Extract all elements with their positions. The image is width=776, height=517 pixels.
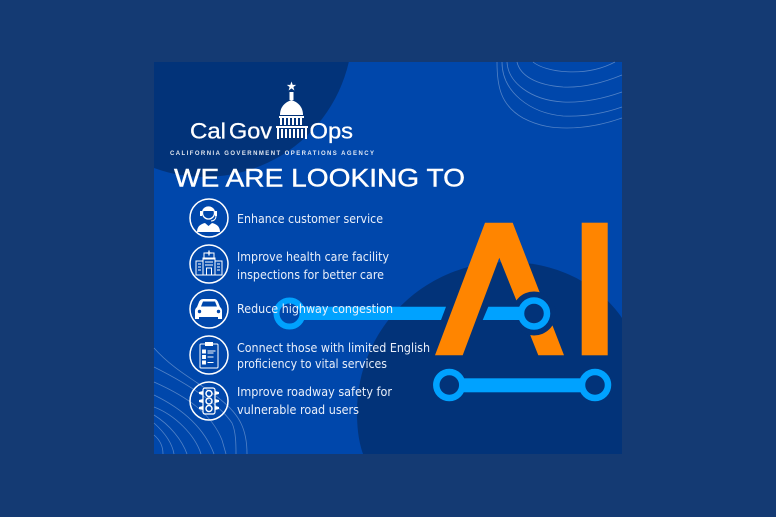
item: health care inspections	[190, 245, 389, 283]
letter A	[435, 223, 564, 355]
item: roadway safety	[190, 382, 392, 420]
icon: clipboard checklist	[190, 336, 228, 374]
icon: headset agent	[190, 199, 228, 237]
text: Enhance customer service	[237, 212, 383, 226]
icon: hospital	[190, 245, 228, 283]
circuit line through A	[276, 300, 547, 326]
text: Connect those with limited English	[237, 341, 430, 355]
icon: traffic light	[190, 382, 228, 420]
logo: CalGovOps capitol	[190, 82, 353, 144]
icon: capitol dome	[276, 82, 308, 139]
text: Reduce highway congestion	[237, 302, 393, 316]
item: roadway safety: vulnerable road users	[237, 403, 359, 417]
logo wordmark: Ops: Ops	[310, 118, 353, 144]
logo subtitle: CALIFORNIA GOVERNMENT OPERATIONS AGENCY	[170, 151, 374, 157]
logo wordmark: Cal: Cal	[190, 118, 226, 144]
item: customer service	[190, 199, 383, 237]
icon: car	[190, 290, 228, 328]
graphic: AI letters with circuit lines	[276, 223, 608, 398]
item: limited English proficiency: proficiency to vital services	[237, 357, 387, 371]
item: limited English proficiency	[190, 336, 430, 374]
heading: WE ARE LOOKING TO	[174, 164, 465, 192]
item: highway congestion	[190, 290, 393, 328]
logo wordmark: Gov: Gov	[229, 118, 273, 144]
panel: blue poster background	[154, 62, 622, 454]
text: Improve roadway safety for	[237, 385, 392, 399]
circuit line below AI	[436, 372, 608, 398]
letter I	[582, 223, 608, 355]
text: Improve health care facility	[237, 250, 389, 264]
item: health care inspections: inspections for better care	[237, 268, 384, 282]
